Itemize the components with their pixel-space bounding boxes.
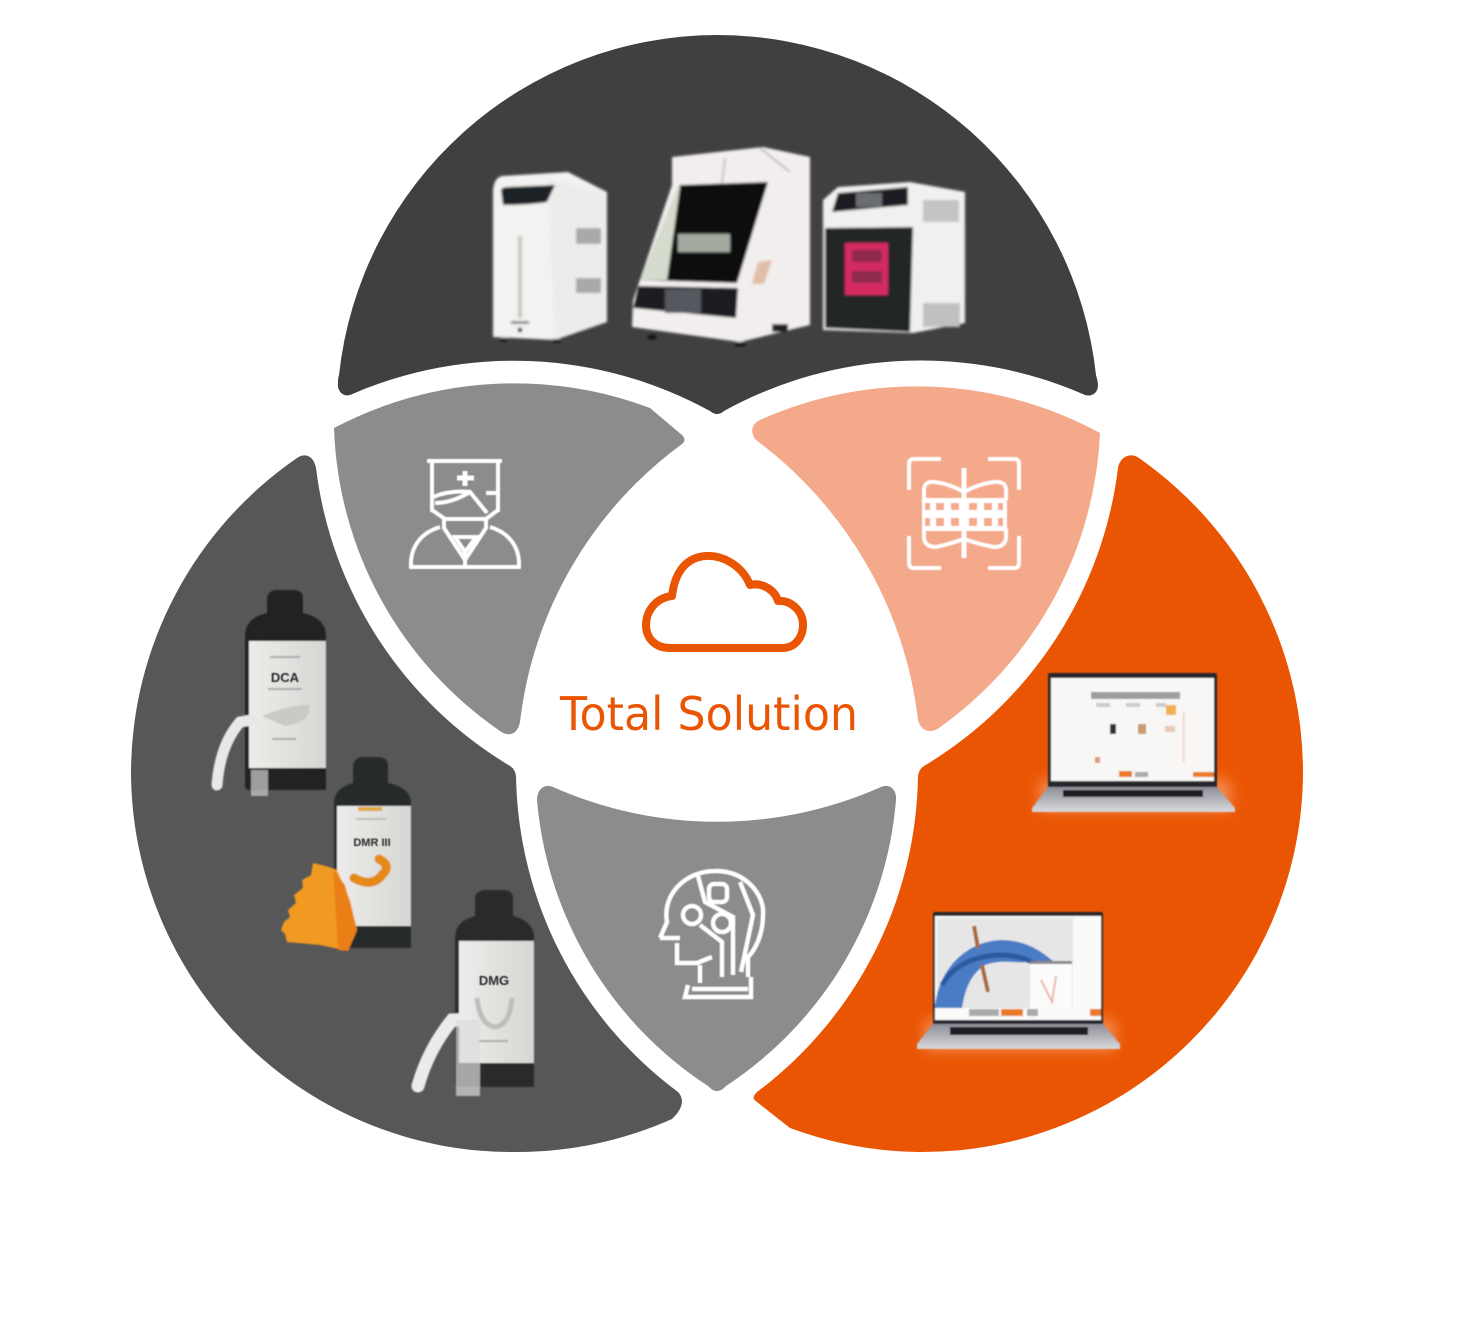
icon: cloud [646,556,803,648]
icon: doctor [411,461,519,567]
panel: doctor gray segment [334,383,684,734]
machine: center milling unit [632,147,810,346]
bottles: resin products [217,590,534,1096]
machines: three white devices [493,147,965,346]
panel: scan salmon segment [752,386,1100,731]
laptop: aligner design software [917,912,1120,1050]
bottle: DMG resin [418,890,534,1096]
panel: top machines segment [338,35,1098,414]
panel: AI gray segment [537,786,896,1091]
title: total solution: Total Solution [559,687,858,741]
machine: right curing unit [823,182,965,333]
icon: dental scan [909,459,1019,568]
label text: DCA: DCA [271,670,300,685]
label text: DMG: DMG [479,973,509,988]
bottle: DMR III resin [281,757,411,951]
bottle: DCA resin [217,590,326,796]
label text: DMR III: DMR III [353,837,391,849]
panel: left materials segment [131,455,682,1152]
icon: AI head [660,871,763,997]
laptop: catalog software [1032,673,1235,812]
machine: left unit [493,172,607,342]
panel: right software segment [754,455,1303,1152]
